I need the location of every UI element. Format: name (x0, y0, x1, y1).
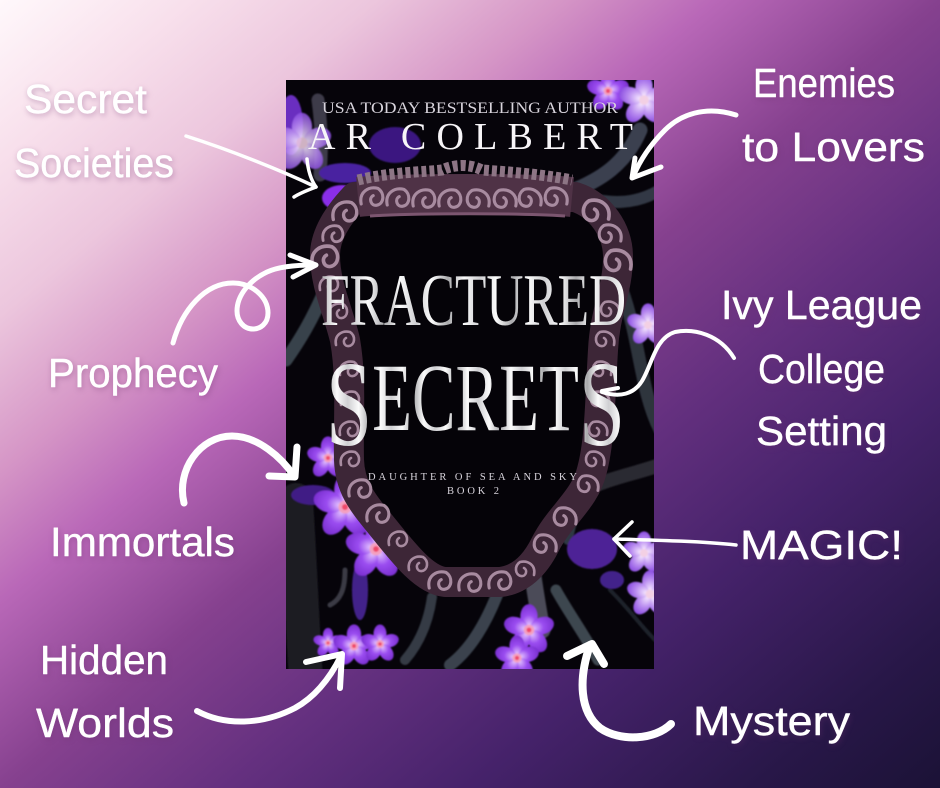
arrow: Hidden Worlds (197, 654, 342, 722)
arrow: Ivy League College Setting (602, 331, 734, 395)
label: Hidden Worlds: Worlds (36, 700, 174, 746)
author name: AR COLBERT (308, 116, 633, 158)
arrow: Mystery (567, 644, 671, 737)
book number: BOOK 2 (447, 486, 499, 497)
label: Ivy League College Setting: Ivy League (721, 282, 922, 328)
title line 2: ECRET (372, 345, 579, 451)
frame band (325, 197, 618, 582)
series name: DAUGHTER OF SEA AND SKY (368, 472, 577, 483)
arrow: Immortals (182, 436, 297, 503)
branches (286, 100, 660, 680)
label: Ivy League College Setting (721, 282, 922, 454)
arrow: Prophecy (173, 255, 316, 343)
book title (322, 276, 624, 446)
label: Secret Societies: Secret (24, 76, 148, 122)
label: Ivy League College Setting: College (758, 346, 885, 392)
title line 2: S (579, 336, 625, 472)
label: Hidden Worlds: Hidden (40, 637, 168, 683)
label: Secret Societies (14, 76, 174, 186)
label: Enemies to Lovers (742, 60, 925, 170)
arrow: Secret Societies (186, 136, 316, 197)
cover background (286, 80, 654, 669)
label: MAGIC!: MAGIC! (740, 522, 903, 568)
label: Mystery: Mystery (693, 698, 851, 744)
label: Immortals: Immortals (50, 519, 235, 565)
arrow: Enemies to Lovers (632, 111, 736, 178)
label: Ivy League College Setting: Setting (756, 408, 887, 454)
book cover (286, 80, 654, 669)
label: Prophecy: Prophecy (48, 350, 218, 396)
title line 2: S (326, 336, 372, 472)
label: Hidden Worlds (36, 637, 174, 746)
author credit: USA TODAY BESTSELLING AUTHOR (322, 100, 618, 117)
title line 1: FRACTURED (321, 260, 626, 342)
flowers (286, 80, 654, 669)
label: Secret Societies: Societies (14, 140, 174, 186)
frame scrollwork (312, 188, 631, 591)
top band and ribbon (358, 166, 572, 216)
arrows (173, 111, 736, 737)
arrow: MAGIC! (614, 522, 736, 556)
ornate mirror frame (312, 166, 631, 591)
label: Enemies to Lovers: Enemies (753, 60, 895, 106)
label: Enemies to Lovers: to Lovers (742, 124, 925, 170)
